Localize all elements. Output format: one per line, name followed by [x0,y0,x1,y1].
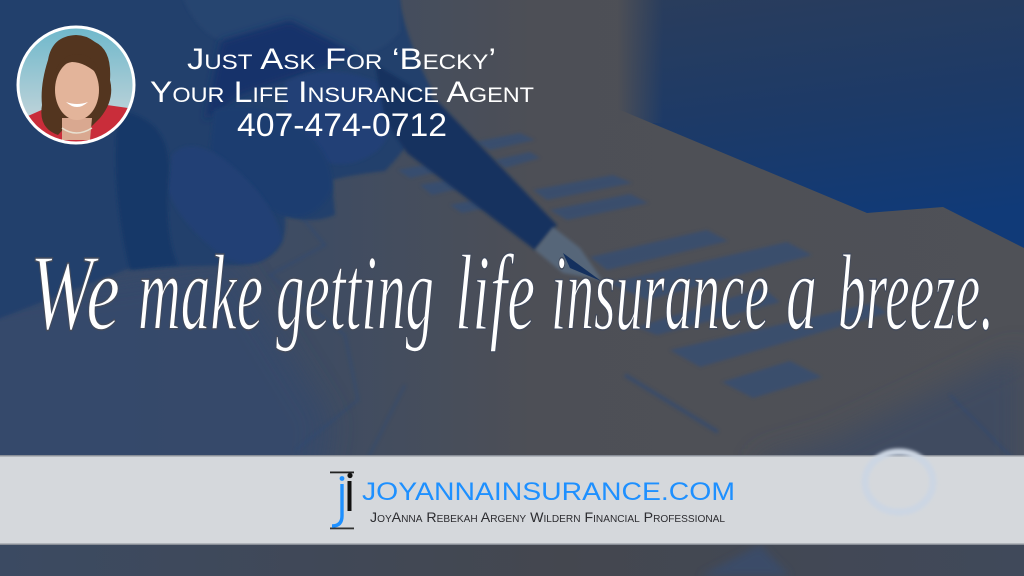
heading line 2: Your Life Insurance Agent [150,76,534,109]
pen [375,64,557,250]
heading line 1: Just Ask For ‘Becky’ [187,43,496,76]
main script slogan: insurance [551,234,769,353]
bottom banner band [0,452,1024,545]
logo mark: ji monogram [330,472,354,529]
agent portrait [15,27,140,145]
agent tagline: JoyAnna Rebekah Argeny Wildern Financial Professional [370,509,725,525]
main script slogan: life [455,234,535,353]
main script slogan [30,234,994,353]
website address: JOYANNAINSURANCE.COM [362,478,735,506]
heading: agent name and phone [150,43,534,143]
hand mass [0,0,432,326]
main script slogan: a [786,234,817,353]
main script slogan: make [138,234,263,353]
main script slogan: We [30,234,120,353]
main script slogan: getting [276,234,434,353]
phone number: 407-474-0712 [237,107,447,143]
